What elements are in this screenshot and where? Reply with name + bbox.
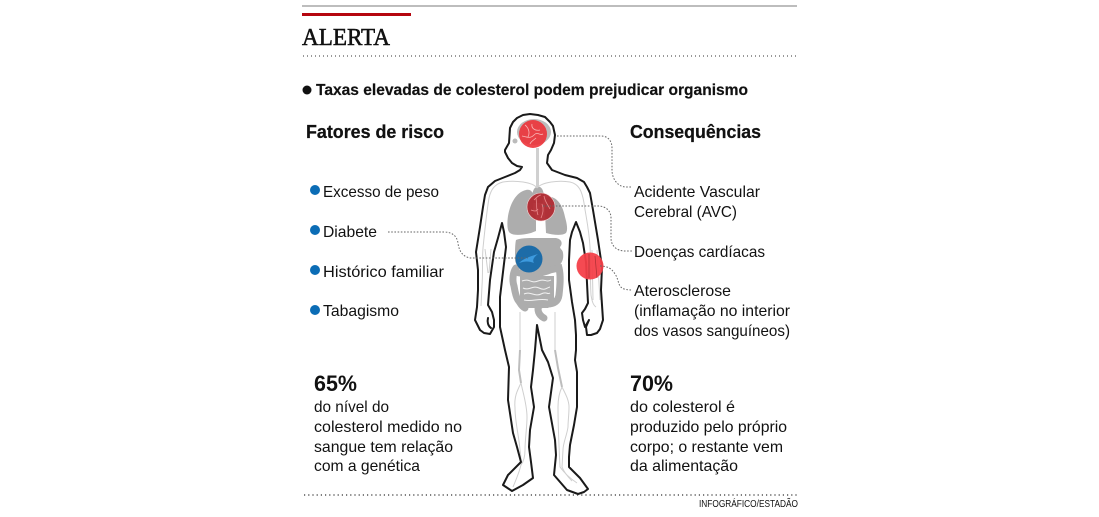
human body figure [475,114,603,494]
risk factor list: Histórico familiar [323,264,445,281]
stat: 65% genetics [314,371,462,475]
callout: heart marker [527,193,555,221]
body outline [475,114,603,494]
credit: INFOGRÁFICO/ESTADÃO [699,497,798,510]
subtitle: Taxas elevadas de colesterol podem prejudicar organismo [316,82,748,99]
heading: risk factors: Fatores de risco [306,122,444,142]
title: ALERTA [302,25,391,51]
risk factor list: Tabagismo [323,303,399,320]
stat: 70% produced by body: produzido pelo próprio [630,419,787,436]
stat: 65% genetics: com a genética [314,458,420,475]
connector: brain to stroke [557,136,632,187]
stat: 70% produced by body: 70% [630,371,673,396]
stat: 70% produced by body: da alimentação [630,458,738,475]
intestine folds [522,280,551,301]
blood vessels and bones [481,181,600,487]
consequences list: Doenças cardíacas [634,244,765,261]
callout: arm artery marker [576,252,604,280]
connector: diabetes to liver [388,232,528,258]
connector: heart to cardiac disease [543,206,632,251]
stat: 65% genetics: sangue tem relação [314,439,453,456]
stat: 65% genetics: colesterol medido no [314,419,462,436]
stat: 70% produced by body [630,371,787,475]
risk factor list: Excesso de peso [323,184,439,201]
consequences list: (inflamação no interior [634,303,791,320]
callout: liver marker [516,246,542,272]
risk factor list: Diabete [323,224,377,241]
consequences list: Cerebral (AVC) [634,204,737,221]
consequences list: Aterosclerose [634,283,731,300]
risk factor list [310,184,445,320]
consequences list [634,184,791,340]
organs [507,119,567,318]
connector: arm to atherosclerosis [600,266,632,290]
stat: 65% genetics: 65% [314,371,357,396]
stat: 65% genetics: do nível do [314,399,389,416]
callout: brain stroke marker [519,120,547,148]
stat: 70% produced by body: do colesterol é [630,399,735,416]
stat: 70% produced by body: corpo; o restante vem [630,439,783,456]
consequences list: Acidente Vascular [634,184,761,201]
heading: consequences: Consequências [630,122,761,142]
consequences list: dos vasos sanguíneos) [634,323,790,340]
